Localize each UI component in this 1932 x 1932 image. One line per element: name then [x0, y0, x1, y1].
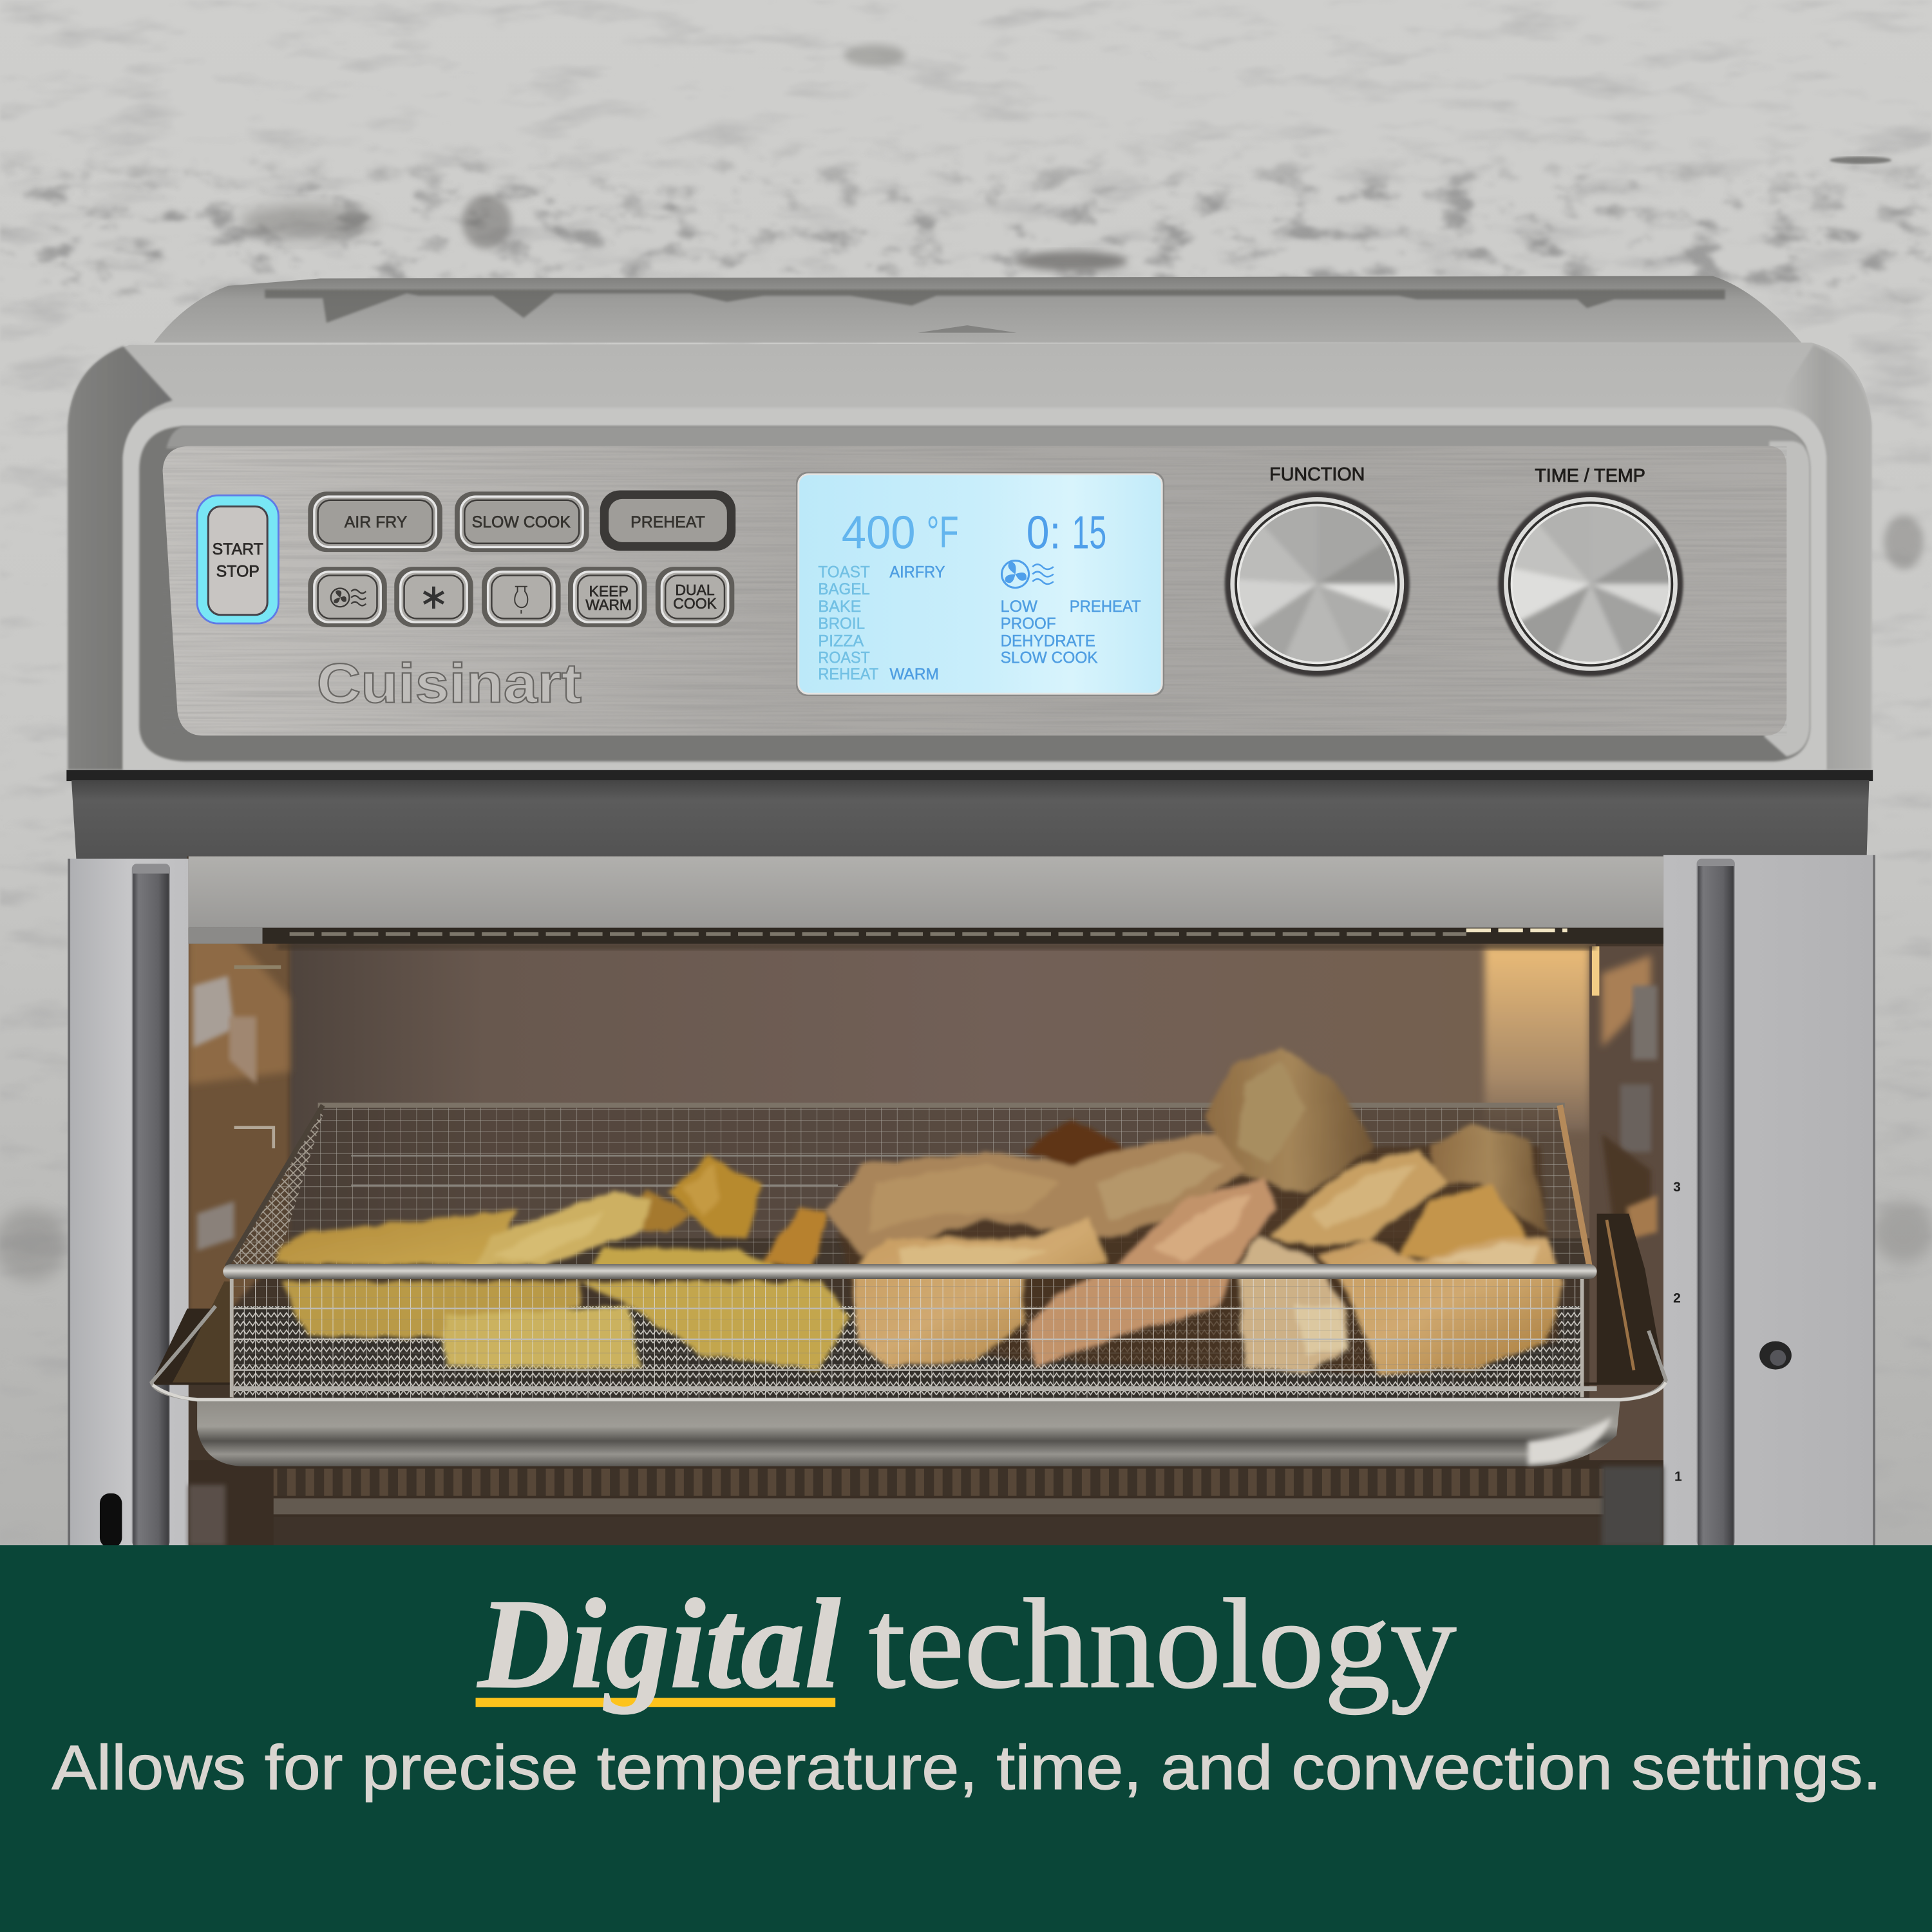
- LCD display: DEHYDRATE: [1001, 632, 1095, 650]
- button: dual cook: DUAL: [675, 582, 715, 598]
- button: keep warm: KEEP: [589, 583, 629, 600]
- rack position numbers: [1673, 1180, 1682, 1484]
- dial: function: [1225, 491, 1410, 677]
- rack position numbers: 1: [1674, 1470, 1682, 1484]
- LCD display: WARM: [889, 665, 939, 683]
- LCD display: 0:: [1027, 506, 1061, 558]
- LCD display: BAGEL: [818, 580, 870, 598]
- recessed control plate: [163, 446, 1786, 735]
- food: french fries: [274, 1156, 850, 1370]
- LCD display: BAKE: [818, 598, 861, 616]
- heating element under tray: [189, 1460, 1663, 1546]
- top rail above oven cavity: [189, 857, 1663, 944]
- heading underline: [476, 1698, 835, 1707]
- button: oven light: [482, 567, 561, 627]
- LCD display: REHEAT: [818, 665, 878, 683]
- LCD display: PROOF: [1001, 615, 1056, 633]
- basket floor mesh: [234, 1306, 1584, 1399]
- button: preheat: PREHEAT: [630, 513, 705, 531]
- rack position numbers: 2: [1673, 1291, 1681, 1305]
- LCD display: 15: [1072, 506, 1106, 558]
- left door side column: [68, 859, 189, 1548]
- dial: time / temp: [1499, 491, 1683, 677]
- button: start stop: [197, 495, 278, 623]
- LCD display: PREHEAT: [1070, 598, 1141, 616]
- button: slow cook: [455, 491, 589, 552]
- oven interior: [187, 857, 1666, 1546]
- LCD display: SLOW COOK: [1001, 649, 1098, 667]
- LCD display: [796, 472, 1164, 696]
- button: start stop: STOP: [216, 562, 260, 580]
- heading: technology: [869, 1573, 1456, 1715]
- tray inner walls: [150, 1214, 1666, 1385]
- button: start stop: START: [213, 540, 263, 558]
- footer band: [0, 1545, 1932, 1932]
- LCD display: LOW: [1001, 598, 1037, 616]
- right door side column: [1663, 855, 1875, 1546]
- button: air fry: [308, 491, 442, 552]
- button: dual cook: COOK: [673, 595, 717, 612]
- label: time / temp: TIME / TEMP: [1535, 466, 1645, 486]
- button: keep warm: WARM: [585, 596, 632, 613]
- button: dual cook: [656, 567, 734, 627]
- LCD display: AIRFRY: [889, 563, 945, 581]
- button: preheat: [600, 490, 735, 551]
- LCD display: ROAST: [818, 649, 870, 667]
- oven lid: [154, 276, 1801, 343]
- oven control fascia: [68, 343, 1871, 770]
- brand logo: Cuisinart: Cuisinart: [317, 653, 582, 715]
- heading: Digital: [477, 1573, 840, 1715]
- basket front mesh and rim: [223, 1264, 1597, 1399]
- subheading: Allows for precise temperature, time, and convection settings.: [52, 1732, 1882, 1803]
- button: keep warm: [568, 567, 647, 627]
- LCD display: PIZZA: [818, 632, 864, 650]
- rack position numbers: 3: [1673, 1180, 1681, 1195]
- door handle band: [66, 770, 1873, 861]
- button: snowflake: [394, 567, 473, 627]
- air fry basket: back mesh: [224, 1105, 1592, 1269]
- LCD display: TOAST: [818, 563, 870, 581]
- LCD display: 400: [842, 506, 916, 558]
- food: chicken wings: [826, 1047, 1565, 1374]
- button: convection fan: [308, 567, 387, 627]
- button: slow cook: SLOW COOK: [472, 513, 571, 531]
- baking tray: [151, 1306, 1666, 1466]
- label: function: FUNCTION: [1269, 464, 1365, 485]
- LCD display: °F: [927, 507, 959, 556]
- button: air fry: AIR FRY: [345, 513, 408, 531]
- LCD display: BROIL: [818, 615, 865, 633]
